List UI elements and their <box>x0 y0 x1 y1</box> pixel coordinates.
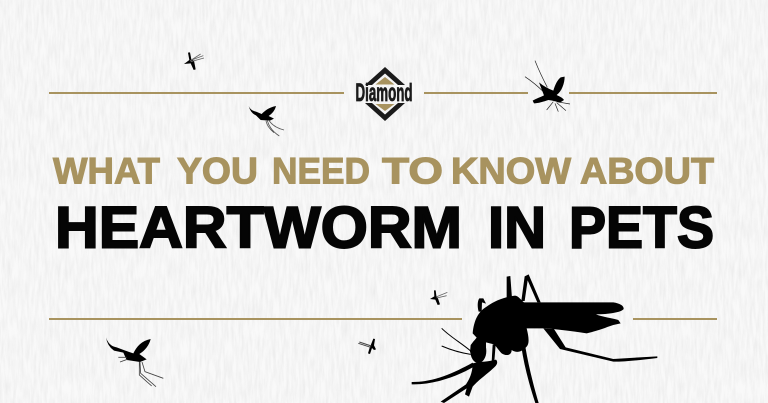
title line: heartworm in pets <box>55 196 714 260</box>
title line: heartworm in pets: HEARTWORM <box>55 196 462 260</box>
title line: what you need to know about: YOU <box>177 150 258 192</box>
icon: large mosquito <box>412 274 657 403</box>
title line: what you need to know about: KNOW <box>451 150 572 192</box>
icon: small mosquito near bottom line <box>430 290 447 305</box>
icon: mosquito lower middle <box>358 339 376 354</box>
title line: what you need to know about: WHAT <box>53 150 160 192</box>
title line: heartworm in pets: PETS <box>569 196 714 260</box>
title line: what you need to know about: NEED <box>272 150 370 192</box>
title line: what you need to know about <box>53 150 714 192</box>
icon: mosquito lower left <box>106 337 163 387</box>
icon: Diamond logo: Diamond <box>356 79 412 107</box>
icon: mosquito upper left <box>184 52 204 70</box>
gold divider lines <box>49 92 717 320</box>
title line: what you need to know about: ABOUT <box>580 150 714 192</box>
icon: Diamond logo <box>356 67 412 121</box>
title line: heartworm in pets: IN <box>488 196 546 260</box>
icon: top right mosquito <box>525 61 570 112</box>
title line: what you need to know about: TO <box>382 150 443 192</box>
icon: mosquito upper middle <box>249 106 284 136</box>
